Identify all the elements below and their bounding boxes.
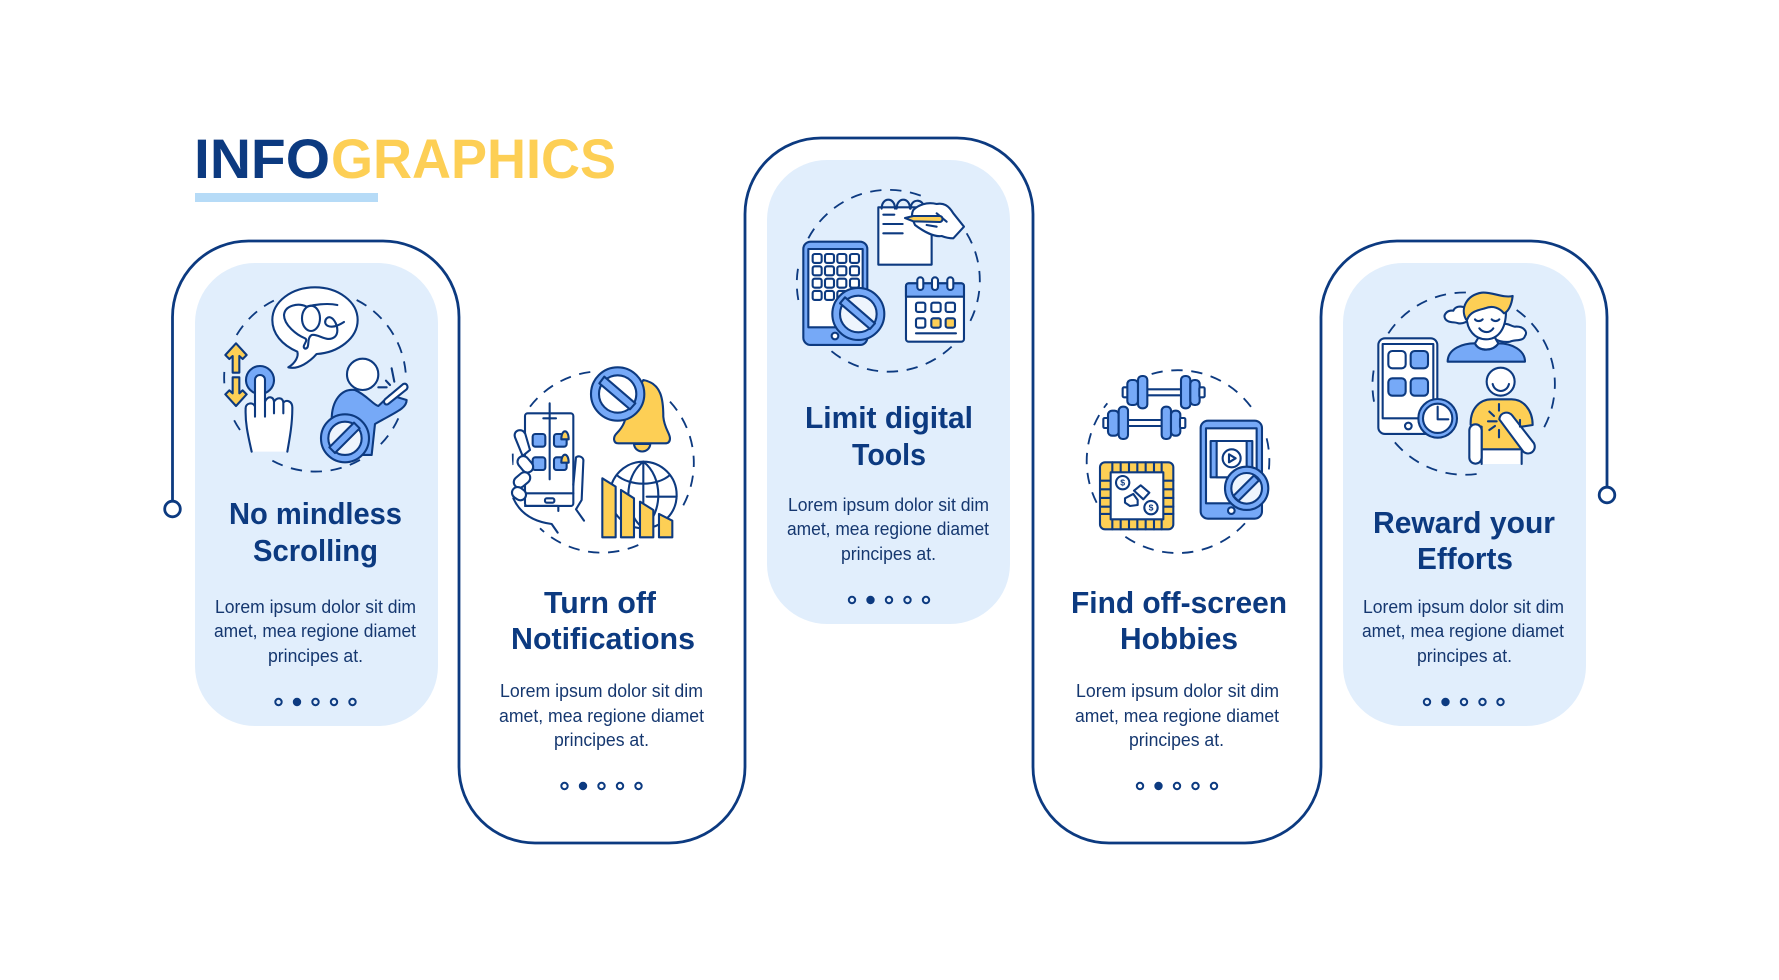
snake outline connecting the panels bbox=[165, 138, 1615, 843]
heading: limit digital tools: Limit digital bbox=[805, 400, 973, 435]
text: reward your efforts body: Lorem ipsum dolor sit dim bbox=[1363, 597, 1564, 617]
title bbox=[194, 127, 616, 190]
heading: turn off notifications: Notifications bbox=[511, 621, 695, 656]
text: turn off notifications body bbox=[499, 681, 704, 750]
text: find off-screen hobbies body: principes at. bbox=[1129, 730, 1224, 750]
title: GRAPHICS bbox=[331, 127, 616, 190]
heading: limit digital tools bbox=[805, 400, 973, 472]
title underline bbox=[195, 193, 378, 202]
heading: find off-screen hobbies: Hobbies bbox=[1120, 621, 1238, 656]
text: find off-screen hobbies body: Lorem ipsum dolor sit dim bbox=[1076, 681, 1279, 701]
heading: no mindless scrolling bbox=[229, 496, 402, 568]
text: no mindless scrolling body bbox=[214, 597, 416, 666]
text: reward your efforts body: principes at. bbox=[1417, 646, 1512, 666]
pagination dots 1 bbox=[275, 699, 356, 705]
text: no mindless scrolling body: principes at. bbox=[268, 646, 363, 666]
icon: find off-screen hobbies: $ bbox=[1149, 503, 1154, 513]
heading: limit digital tools: Tools bbox=[852, 437, 926, 472]
icon: reward your efforts bbox=[1372, 292, 1555, 475]
heading: find off-screen hobbies bbox=[1071, 585, 1287, 656]
heading: find off-screen hobbies: Find off-screen bbox=[1071, 585, 1287, 620]
text: find off-screen hobbies body: amet, mea regione diamet bbox=[1075, 706, 1279, 726]
pagination dots 3 bbox=[849, 597, 929, 603]
heading: reward your efforts: Reward your bbox=[1373, 505, 1555, 540]
pagination dots 4 bbox=[1137, 783, 1217, 789]
text: find off-screen hobbies body bbox=[1075, 681, 1279, 750]
text: reward your efforts body: amet, mea regione diamet bbox=[1362, 621, 1564, 641]
text: turn off notifications body: amet, mea regione diamet bbox=[499, 706, 704, 726]
text: reward your efforts body bbox=[1362, 597, 1564, 666]
text: limit digital tools body: amet, mea regione diamet bbox=[787, 519, 989, 539]
text: turn off notifications body: Lorem ipsum dolor sit dim bbox=[500, 681, 703, 701]
panel: no mindless scrolling background bbox=[195, 263, 438, 726]
heading: no mindless scrolling: No mindless bbox=[229, 496, 402, 531]
panel: limit digital tools background bbox=[767, 160, 1010, 624]
text: no mindless scrolling body: amet, mea regione diamet bbox=[214, 621, 416, 641]
heading: turn off notifications bbox=[511, 585, 695, 656]
heading: turn off notifications: Turn off bbox=[544, 585, 657, 620]
heading: reward your efforts bbox=[1373, 505, 1555, 576]
heading: no mindless scrolling: Scrolling bbox=[253, 533, 378, 568]
icon: no mindless scrolling bbox=[224, 287, 407, 472]
title: INFO bbox=[194, 127, 330, 190]
pagination dots 5 bbox=[1424, 699, 1504, 705]
icon: find off-screen hobbies: $ bbox=[1120, 478, 1125, 488]
text: limit digital tools body: principes at. bbox=[841, 544, 936, 564]
panel: reward your efforts background bbox=[1343, 263, 1586, 726]
pagination dots 2 bbox=[561, 783, 642, 789]
text: limit digital tools body: Lorem ipsum dolor sit dim bbox=[788, 495, 989, 515]
icon: limit digital tools bbox=[797, 190, 980, 372]
text: no mindless scrolling body: Lorem ipsum dolor sit dim bbox=[215, 597, 416, 617]
text: limit digital tools body bbox=[787, 495, 989, 564]
heading: reward your efforts: Efforts bbox=[1417, 541, 1513, 576]
icon: turn off notifications bbox=[510, 367, 694, 553]
icon: find off-screen hobbies bbox=[1087, 370, 1269, 553]
text: turn off notifications body: principes at. bbox=[554, 730, 649, 750]
